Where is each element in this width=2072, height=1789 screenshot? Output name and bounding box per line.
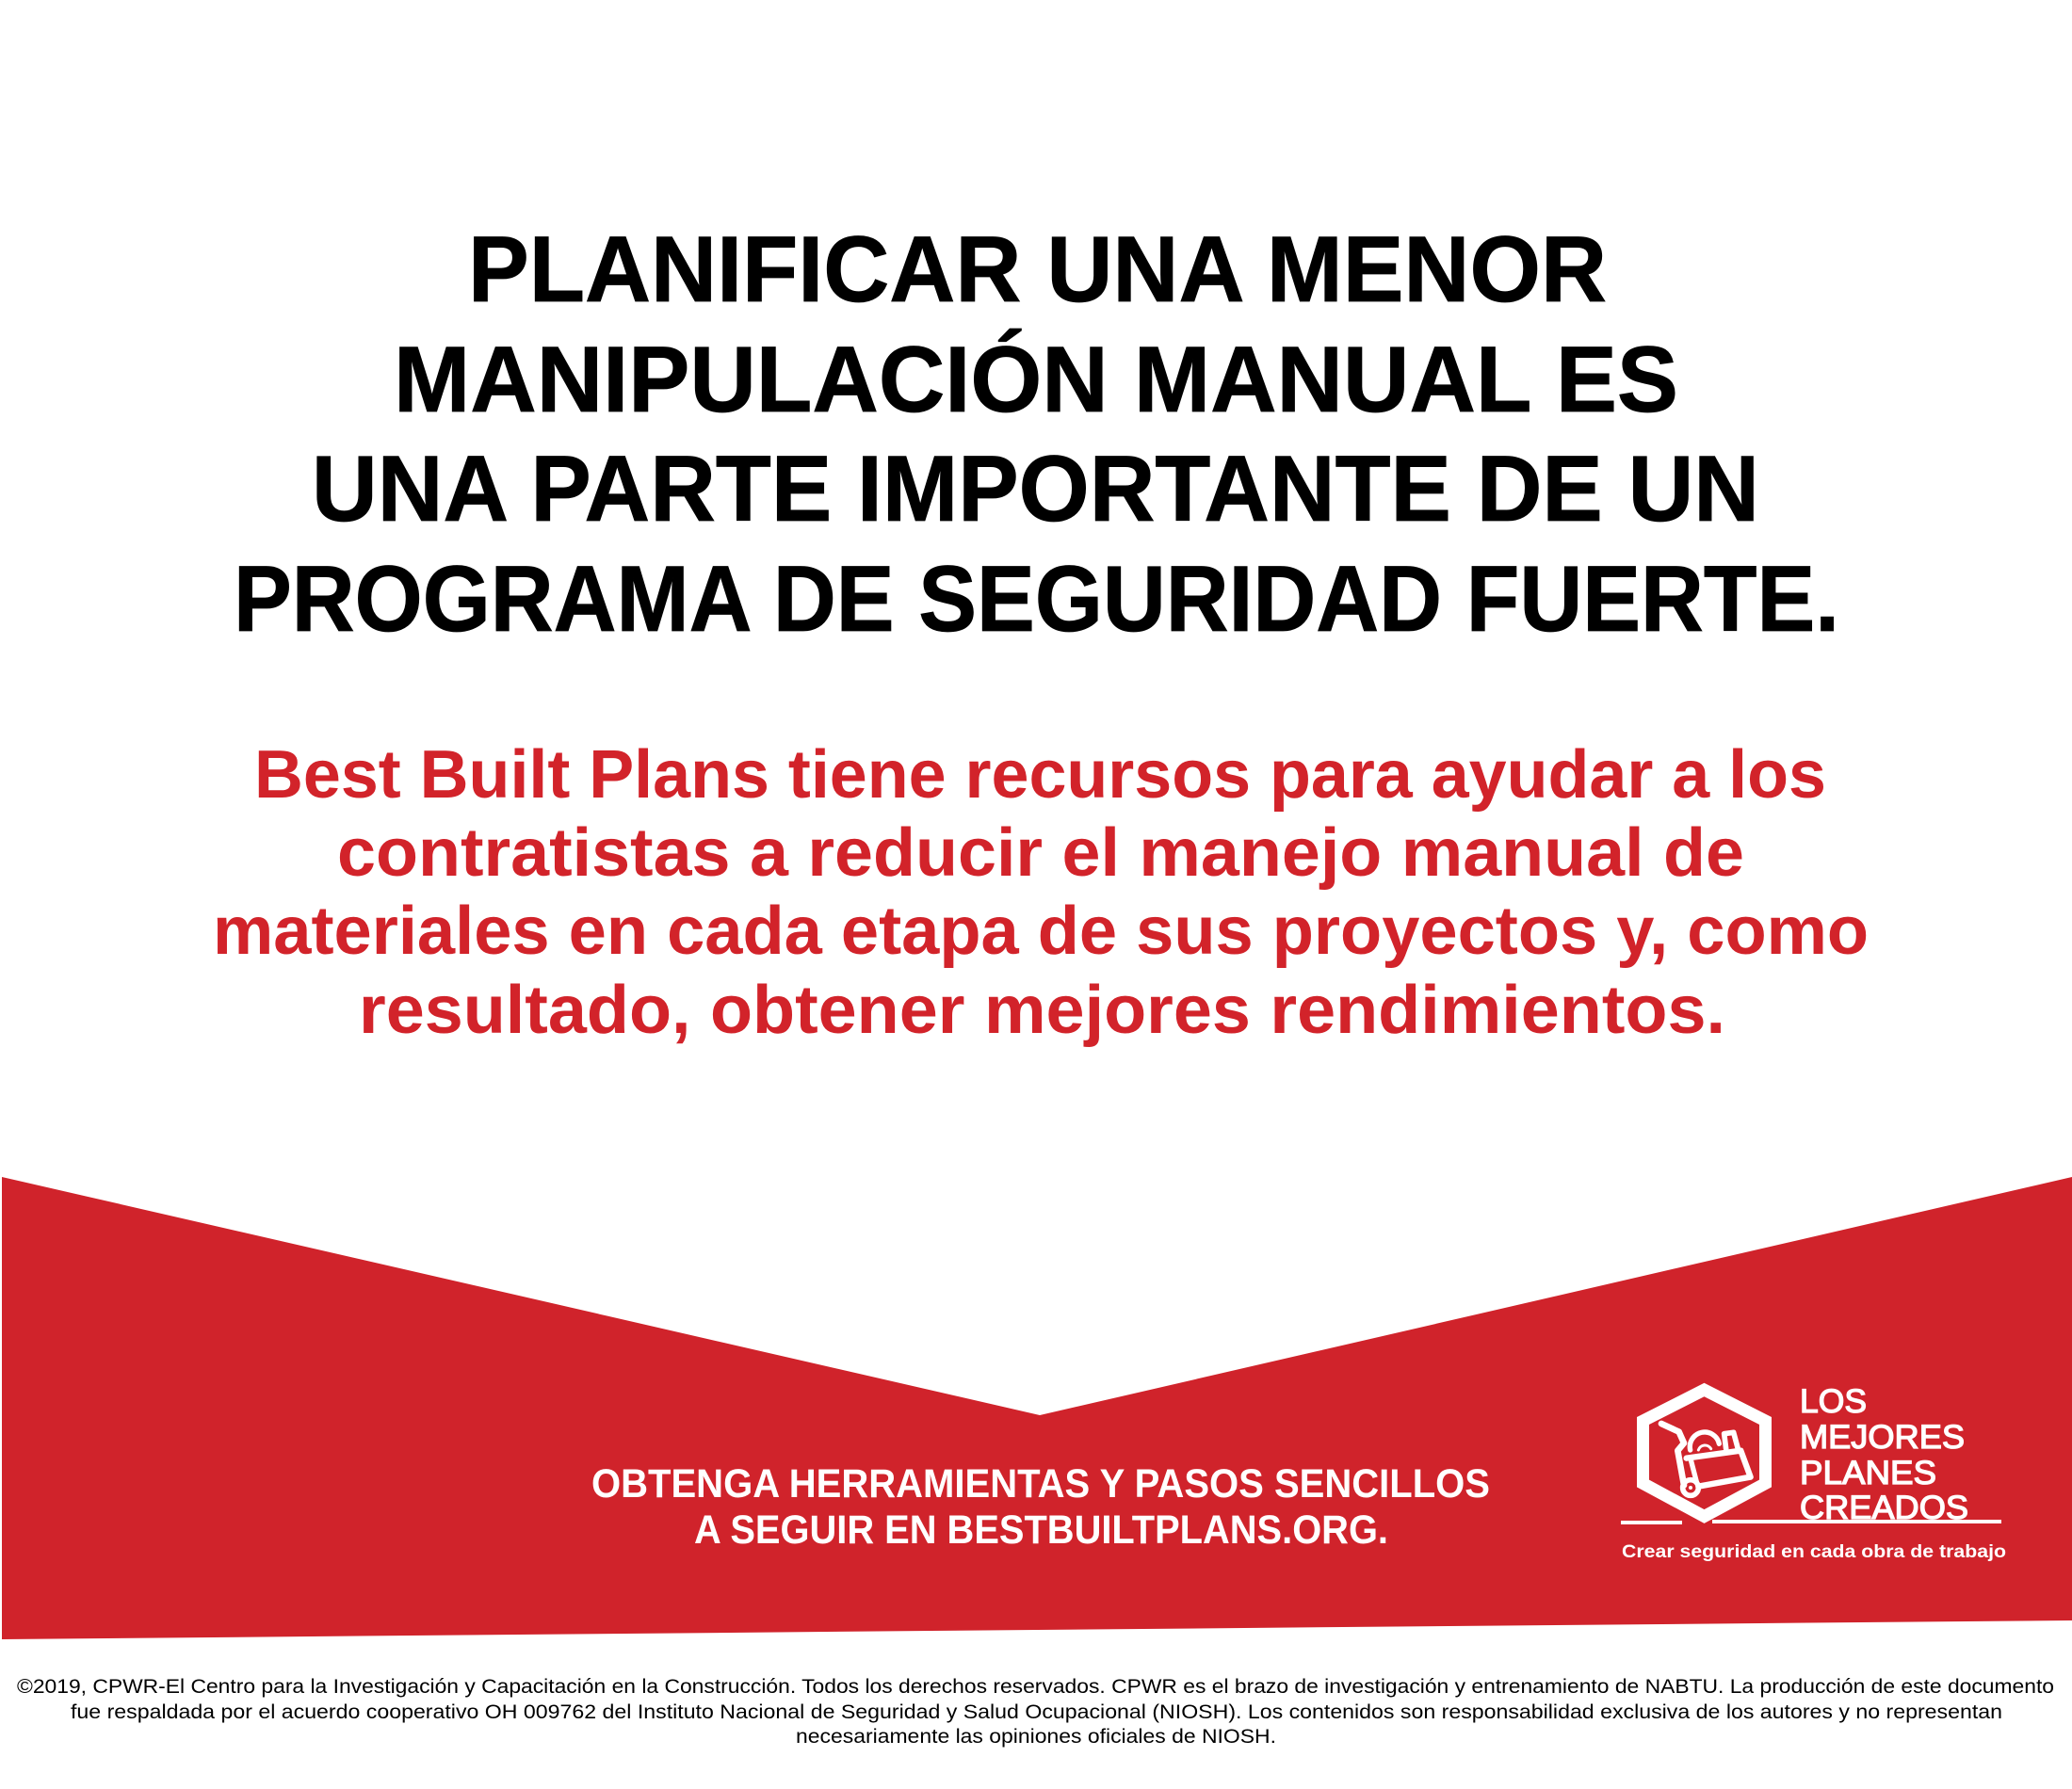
logo wordmark: MEJORES — [1800, 1419, 1965, 1456]
title — [234, 217, 1839, 651]
red subheading text: materiales en cada etapa de sus proyectos y, como — [213, 894, 1869, 969]
title: UNA PARTE IMPORTANTE DE UN — [312, 436, 1759, 540]
red subheading text: contratistas a reducir el manejo manual de — [337, 815, 1744, 891]
footer disclaimer: ©2019, CPWR-El Centro para la Investigación y Capacitación en la Construcción. Todos los derechos reservados. CPWR es el brazo de investigación y entrenamiento de NABTU. La producción de este documento — [17, 1676, 2054, 1698]
title: MANIPULACIÓN MANUAL ES — [394, 327, 1678, 431]
logo wordmark: LOS — [1800, 1383, 1867, 1420]
logo wordmark: PLANES — [1800, 1455, 1936, 1491]
logo: Los Mejores Planes Creados — [1621, 1383, 2006, 1562]
footer disclaimer: fue respaldada por el acuerdo cooperativo OH 009762 del Instituto Nacional de Seguridad y Salud Ocupacional (NIOSH). Los contenidos son responsabilidad exclusiva de los autores y no representan — [71, 1701, 2002, 1723]
red subheading text — [213, 737, 1869, 1048]
red subheading text: resultado, obtener mejores rendimientos. — [359, 973, 1725, 1048]
red subheading text: Best Built Plans tiene recursos para ayudar a los — [254, 737, 1826, 813]
logo tagline: Crear seguridad en cada obra de trabajo — [1622, 1542, 2006, 1562]
call to action: A SEGUIR EN BESTBUILTPLANS.ORG. — [694, 1508, 1388, 1553]
footer disclaimer: necesariamente las opiniones oficiales de NIOSH. — [796, 1726, 1276, 1748]
logo baseline rules — [1621, 1520, 2001, 1524]
logo wordmark — [1800, 1383, 1968, 1526]
call to action: OBTENGA HERRAMIENTAS Y PASOS SENCILLOS — [591, 1462, 1490, 1507]
footer disclaimer — [17, 1676, 2054, 1748]
icon: hand truck — [1661, 1424, 1751, 1495]
title: PLANIFICAR UNA MENOR — [468, 217, 1607, 321]
red chevron banner — [2, 1177, 2072, 1639]
logo wordmark: CREADOS — [1800, 1490, 1968, 1526]
icon: hexagon — [1643, 1390, 1765, 1516]
call to action — [591, 1462, 1490, 1553]
title: PROGRAMA DE SEGURIDAD FUERTE. — [234, 546, 1839, 651]
